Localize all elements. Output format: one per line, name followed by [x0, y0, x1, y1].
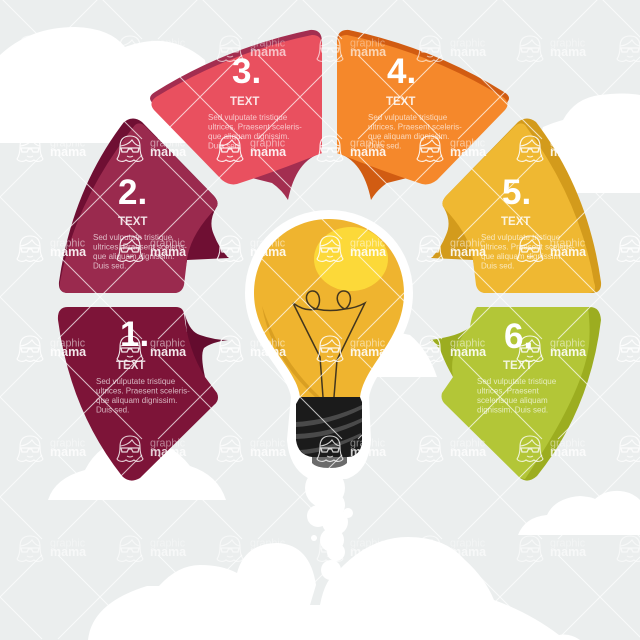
watermark logos: mama — [450, 345, 487, 359]
watermark logos: mama — [350, 245, 387, 259]
text: panel 2: Duis sed. — [93, 262, 126, 270]
watermark logos: mama — [550, 245, 587, 259]
bulb glass — [254, 219, 404, 397]
text: panel 6 — [477, 317, 557, 414]
text: panel 5: ultrices. Praesent sceleris- — [481, 242, 575, 252]
text: panel 2: Sed vulputate tristique — [93, 233, 173, 242]
text: panel 3: 3. — [232, 52, 261, 91]
cloud: bottom large — [88, 537, 580, 640]
watermark logos: graphic — [50, 238, 86, 250]
watermark logos: mama — [350, 145, 387, 159]
base cap — [312, 457, 347, 468]
watermark logos: mama — [250, 45, 287, 59]
watermark logos: graphic — [50, 138, 86, 150]
watermark logos — [17, 36, 640, 562]
watermark logos: mama — [550, 145, 587, 159]
watermark logos: graphic — [550, 38, 586, 50]
text: panel 3 — [208, 52, 302, 150]
watermark logos: mama — [150, 245, 187, 259]
watermark logos: mama — [50, 45, 87, 59]
watermark logos: graphic — [50, 338, 86, 350]
panel 3 — [150, 30, 322, 200]
text: panel 6: TEXT — [503, 360, 532, 372]
watermark logos: graphic — [250, 238, 286, 250]
text: panel 4: Sed vulputate tristique — [368, 113, 448, 122]
watermark logos: mama — [450, 445, 487, 459]
text: panel 5: 5. — [502, 173, 531, 212]
watermark logos: mama — [550, 445, 587, 459]
text: panel 1 — [96, 315, 190, 414]
text: panel 1: 1. — [120, 315, 149, 354]
text: panel 6: ultrices. Praesent — [477, 386, 540, 396]
text: panel 6: Sed vulputate tristique — [477, 377, 557, 386]
watermark logos: mama — [250, 145, 287, 159]
bulb highlight — [314, 227, 388, 291]
text: panel 3: Duis sed. — [208, 142, 241, 150]
cloud: lower left — [48, 438, 226, 500]
text: panel 1: TEXT — [116, 360, 145, 372]
text: panel 4: que aliquam dignissim. — [368, 132, 449, 141]
text: panel 2: ultrices. Praesent sceleris- — [93, 242, 187, 252]
text: panel 2 — [93, 173, 187, 270]
cloud: top left — [0, 27, 215, 143]
watermark logos: mama — [250, 245, 287, 259]
watermark logos: graphic — [350, 538, 386, 550]
text: panel 2: 2. — [118, 173, 147, 212]
panel 5 — [431, 118, 601, 293]
watermark logos: graphic — [550, 538, 586, 550]
watermark logos: graphic — [550, 138, 586, 150]
watermark logos: mama — [450, 545, 487, 559]
text: panel 6: scelerisque aliquam — [477, 396, 548, 405]
watermark logos: graphic — [250, 538, 286, 550]
watermark logos: mama — [50, 445, 87, 459]
watermark logos: graphic — [450, 538, 486, 550]
filament — [293, 291, 365, 397]
watermark logos: graphic — [150, 138, 186, 150]
watermark logos: graphic — [150, 538, 186, 550]
text: panel 4: TEXT — [386, 96, 415, 108]
bulb halo — [254, 219, 404, 470]
watermark logos: mama — [50, 345, 87, 359]
watermark logos: graphic — [550, 338, 586, 350]
panel 4 — [337, 30, 509, 200]
watermark logos: mama — [550, 45, 587, 59]
watermark logos: graphic — [550, 438, 586, 450]
panel 2 — [59, 118, 229, 293]
watermark logos: mama — [450, 245, 487, 259]
watermark logos: graphic — [450, 338, 486, 350]
watermark logos: mama — [150, 545, 187, 559]
watermark logos: graphic — [450, 138, 486, 150]
base stripes — [296, 405, 362, 454]
panel 1 — [58, 307, 228, 481]
watermark logos: graphic — [250, 338, 286, 350]
smoke column — [305, 468, 353, 580]
watermark logos: graphic — [250, 38, 286, 50]
watermark logos: mama — [350, 345, 387, 359]
watermark logos: graphic — [150, 438, 186, 450]
text: panel 1: ultrices. Praesent sceleris- — [96, 386, 190, 396]
watermark logos: mama — [250, 345, 287, 359]
screw base — [296, 397, 362, 457]
watermark logos: mama — [150, 445, 187, 459]
watermark logos: mama — [350, 45, 387, 59]
text: panel 1: que aliquam dignissim. — [96, 396, 177, 405]
panel 6 — [430, 307, 601, 481]
text: panel 4: Duis sed. — [368, 142, 401, 150]
text: panel 3: Sed vulputate tristique — [208, 113, 288, 122]
text: panel 1: Sed vulputate tristique — [96, 377, 176, 386]
watermark logos: graphic — [350, 338, 386, 350]
watermark logos: graphic — [50, 538, 86, 550]
watermark logos: graphic — [450, 238, 486, 250]
text: panel 1: Duis sed. — [96, 406, 129, 414]
watermark logos: graphic — [50, 438, 86, 450]
text: panel 3: ultrices. Praesent sceleris- — [208, 122, 302, 132]
watermark logos: graphic — [350, 238, 386, 250]
text: panel 5 — [481, 173, 575, 270]
watermark logos: mama — [550, 545, 587, 559]
watermark logos: graphic — [250, 438, 286, 450]
cloud: lower right — [518, 491, 640, 535]
text: panel 2: que aliquam dignissim. — [93, 252, 174, 261]
watermark logos: graphic — [450, 38, 486, 50]
text: panel 5: Duis sed. — [481, 262, 514, 270]
watermark logos: mama — [50, 545, 87, 559]
watermark logos: graphic — [450, 438, 486, 450]
watermark logos: mama — [50, 145, 87, 159]
watermark logos: graphic — [350, 438, 386, 450]
text: panel 5: Sed vulputate tristique — [481, 233, 561, 242]
text: panel 2: TEXT — [118, 216, 147, 228]
watermark logos: graphic — [350, 138, 386, 150]
watermark logos: mama — [50, 245, 87, 259]
watermark logos: graphic — [150, 338, 186, 350]
cloud: top right — [539, 94, 640, 193]
watermark logos: mama — [350, 545, 387, 559]
bulb shade — [262, 306, 320, 397]
watermark logos: mama — [150, 45, 187, 59]
cloud: behind bulb — [365, 330, 437, 377]
text: panel 5: TEXT — [501, 216, 530, 228]
watermark logos: graphic — [550, 238, 586, 250]
watermark logos: mama — [450, 145, 487, 159]
watermark logos: mama — [450, 45, 487, 59]
watermark logos: mama — [250, 445, 287, 459]
watermark logos: mama — [150, 345, 187, 359]
watermark logos: mama — [250, 545, 287, 559]
watermark logos: graphic — [250, 138, 286, 150]
watermark logos: graphic — [150, 238, 186, 250]
text: panel 4: ultrices. Praesent sceleris- — [368, 122, 462, 132]
text: panel 3: TEXT — [230, 96, 259, 108]
text: panel 4 — [368, 52, 462, 150]
watermark logos: mama — [550, 345, 587, 359]
watermark logos: graphic — [150, 38, 186, 50]
watermark logos: mama — [350, 445, 387, 459]
watermark logos: mama — [150, 145, 187, 159]
watermark logos: graphic — [50, 38, 86, 50]
text: panel 6: dignissim. Duis sed. — [477, 406, 548, 414]
text: panel 4: 4. — [387, 52, 416, 91]
watermark logos: graphic — [350, 38, 386, 50]
text: panel 6: 6. — [504, 317, 533, 356]
light bulb — [254, 219, 404, 470]
text: panel 3: que aliquam dignissim. — [208, 132, 289, 141]
text: panel 5: que aliquam dignissim. — [481, 252, 562, 261]
